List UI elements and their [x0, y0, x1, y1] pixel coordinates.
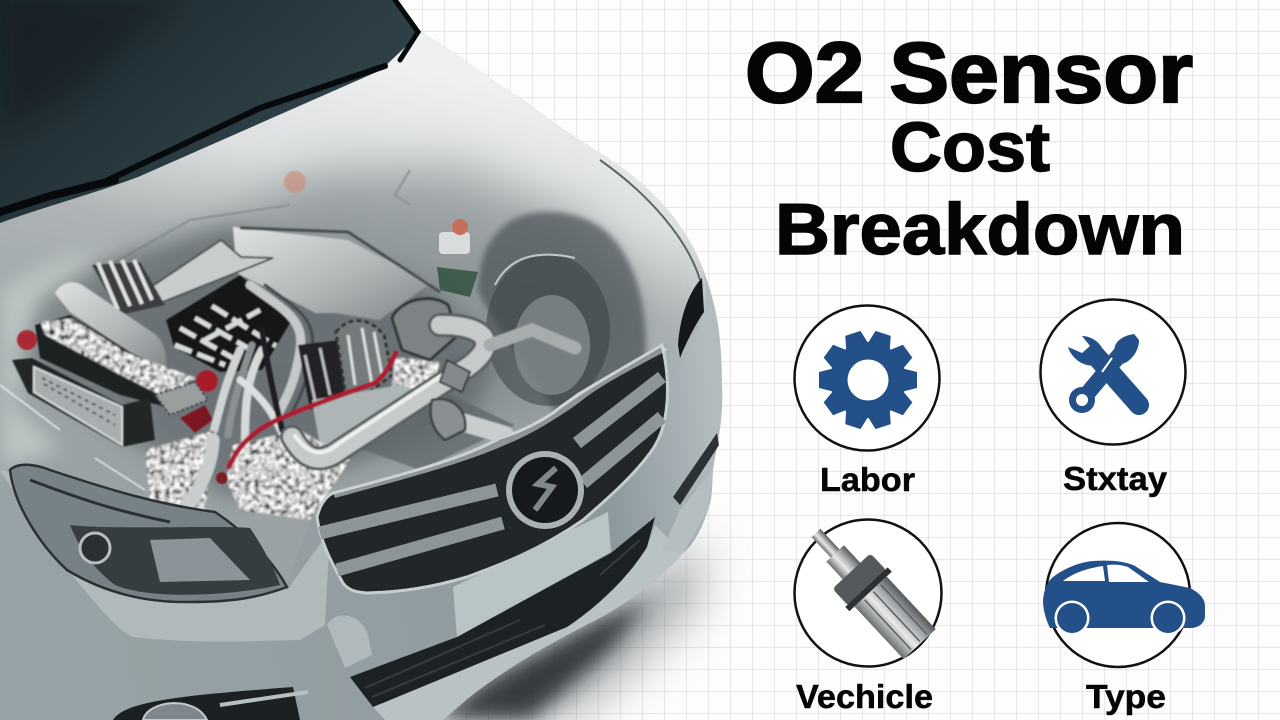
red wire [229, 353, 396, 467]
bonnet crease lines [0, 385, 145, 490]
icon: crossed wrenches [1040, 300, 1186, 444]
left down pipe [147, 440, 213, 525]
car ground shadow [420, 540, 700, 720]
icon: gear (labor) [794, 306, 940, 450]
lower air intake [350, 517, 655, 707]
label: Type: Type [1086, 678, 1166, 715]
pale lower mesh [312, 385, 435, 450]
tyre ghost [478, 212, 646, 420]
car body [0, 0, 722, 720]
fog lamp and lower intake [113, 687, 308, 720]
bay behind lower pipe [350, 390, 515, 470]
hood left highlight [0, 250, 120, 470]
bumper lip highlight [373, 525, 683, 720]
brake fluid reservoir [439, 219, 470, 254]
headlight [10, 465, 287, 602]
red caps [17, 330, 218, 433]
radiator fins [155, 382, 208, 415]
main exhaust pipe [292, 325, 485, 459]
dark bundle [298, 340, 345, 410]
licence plate [453, 512, 611, 637]
engine [0, 225, 575, 525]
turbo housing [392, 299, 458, 360]
title line 2: Cost [890, 108, 1050, 186]
hood front edge glass tint [333, 345, 668, 498]
title line 1: O2 Sensor [745, 26, 1193, 121]
battery box [12, 358, 155, 447]
intake block [233, 227, 431, 320]
header tubes [214, 285, 313, 440]
dark wiring core [166, 275, 292, 372]
faded tubing behind hood [110, 170, 410, 265]
right lower vent [673, 433, 719, 505]
label: Vechicle: Vechicle [796, 678, 933, 715]
rear pipe [490, 330, 575, 348]
icon: oxygen sensor [794, 513, 942, 666]
title [745, 26, 1193, 270]
pale tangled mesh [145, 430, 215, 510]
wiper and cowl [0, 0, 418, 212]
right headlight [678, 278, 704, 358]
coil stack [92, 260, 165, 315]
hood [0, 32, 706, 587]
red wire base [216, 472, 228, 484]
green foliage detail [437, 267, 478, 297]
engine bay shadow [20, 225, 500, 500]
valve cover [55, 282, 166, 372]
label: Stxtay: Stxtay [1063, 460, 1168, 497]
label: Labor: Labor [820, 461, 915, 498]
icon: car [1043, 523, 1205, 667]
lower dense mesh [226, 430, 350, 520]
tow eye cover [327, 615, 372, 668]
car illustration [0, 0, 722, 720]
hood dark interior haze [90, 165, 650, 440]
lower pipe [431, 399, 505, 440]
silver mesh right [390, 357, 440, 400]
grille [317, 345, 667, 593]
upper manifold [142, 240, 273, 307]
exhaust flange [440, 360, 470, 392]
emblem [506, 451, 584, 529]
windshield dark cabin reflection [0, 0, 170, 130]
windshield [0, 0, 421, 223]
front body lower shoulder [0, 470, 330, 642]
peach reservoir cap (faint) [284, 171, 306, 193]
hood right edge line [600, 160, 700, 280]
right corner highlight [662, 470, 713, 553]
title line 3: Breakdown [775, 190, 1185, 270]
cylinder bank [35, 315, 200, 408]
bellows [336, 321, 392, 395]
